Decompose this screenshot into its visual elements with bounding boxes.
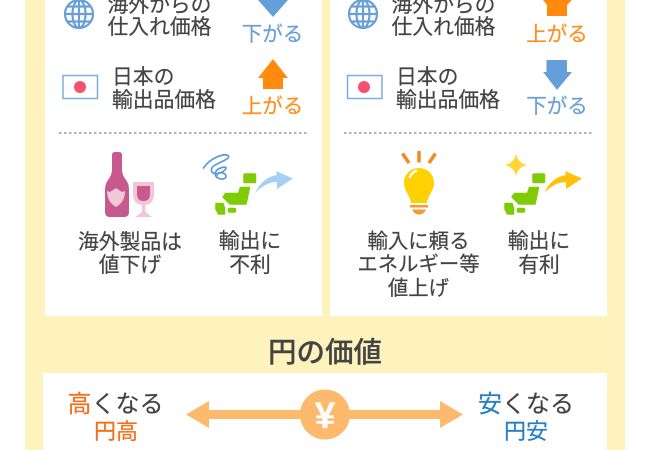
label: rises: 上がる: [526, 23, 588, 46]
icon: up arrow: [258, 59, 288, 89]
panel: yen value scale: [43, 373, 607, 450]
icon: up arrow: [543, 0, 572, 16]
text: imported energy costs more: 輸入に頼る: [368, 230, 469, 253]
icon: down arrow: [543, 60, 572, 90]
text: yen weak: 円安: [504, 419, 548, 444]
icon: japan flag: [63, 76, 98, 98]
text: export disadvantage: 輸出に: [219, 230, 281, 253]
icon: japan flag: [348, 76, 382, 98]
icon: light bulb: [402, 151, 436, 214]
text: yen weak: [478, 391, 574, 444]
text: imported energy costs more: エネルギー等: [357, 253, 480, 276]
text: japan export price: 輸出品価格: [112, 89, 216, 112]
text: export disadvantage: [219, 230, 281, 277]
text: japan export price: 輸出品価格: [396, 89, 500, 112]
text: imported energy costs more: [357, 230, 480, 300]
icon: wine bottle and glass: [105, 152, 154, 217]
icon: globe: [349, 0, 377, 28]
text: yen strong: 円高: [94, 419, 138, 444]
text: overseas purchase price: 仕入れ価格: [108, 16, 212, 39]
text: imported energy costs more: 値上げ: [388, 277, 449, 300]
icon: japan with sparkle and yellow arrow: [505, 154, 582, 214]
label: falls: 下がる: [242, 23, 303, 46]
text: yen weak: 安くなる: [478, 391, 574, 418]
double arrow with yen coin: [186, 390, 463, 440]
icon: japan with swirl and blue arrow: [204, 155, 293, 214]
text: yen strong: 高くなる: [68, 391, 164, 418]
double arrow with yen coin: ¥: [315, 395, 336, 436]
heading: value of yen: 円の価値: [268, 337, 382, 369]
text: overseas purchase price: [392, 0, 496, 39]
text: japan export price: [396, 66, 500, 112]
icon: globe: [65, 0, 93, 28]
text: foreign goods cheaper: 値下げ: [99, 254, 161, 277]
text: overseas purchase price: [108, 0, 212, 39]
text: export disadvantage: 不利: [229, 254, 271, 277]
icon: down arrow: [258, 0, 288, 17]
panel: right column (yen weak): [330, 0, 607, 316]
text: japan export price: [112, 66, 216, 112]
label: rises: 上がる: [242, 95, 303, 118]
text: japan export price: 日本の: [396, 66, 458, 89]
text: export advantage: [508, 230, 570, 277]
text: export advantage: 輸出に: [508, 230, 570, 253]
text: foreign goods cheaper: 海外製品は: [78, 231, 182, 254]
panel: left column (yen strong): [45, 0, 322, 316]
text: overseas purchase price: 仕入れ価格: [392, 16, 496, 39]
text: export advantage: 有利: [518, 254, 560, 277]
text: japan export price: 日本の: [112, 66, 174, 89]
label: falls: 下がる: [526, 95, 588, 118]
text: foreign goods cheaper: [78, 231, 182, 277]
text: yen strong: [68, 391, 164, 444]
